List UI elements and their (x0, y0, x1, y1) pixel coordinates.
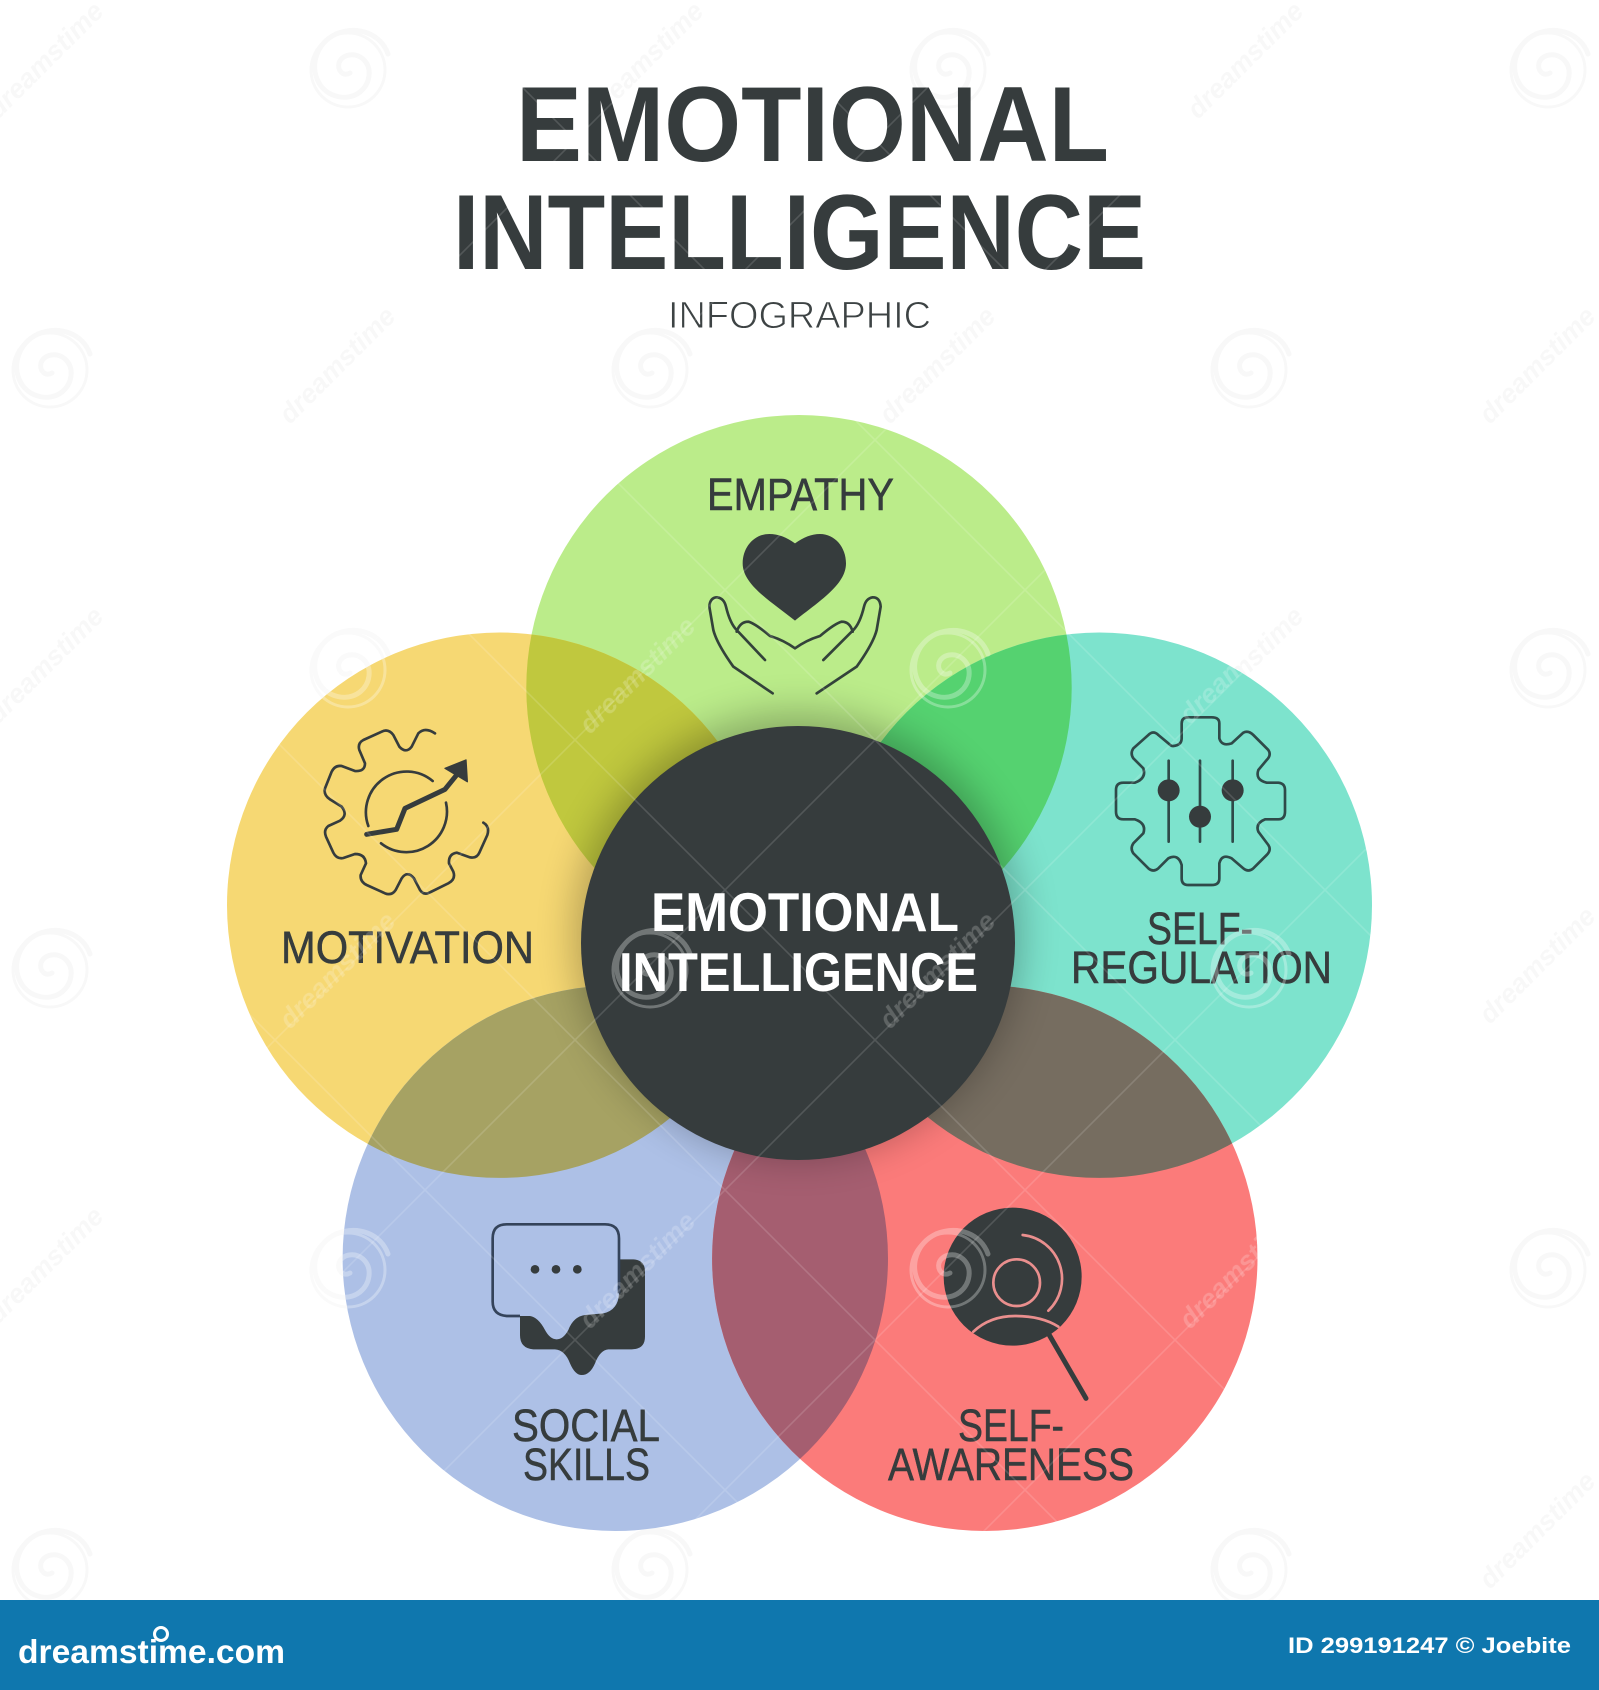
circle: self-awareness (712, 986, 1258, 1531)
center circle shadow (576, 713, 1020, 1157)
watermark: background pattern on white: dreamstime (273, 301, 401, 429)
label: self-regulation: SELF- (1147, 903, 1253, 954)
watermark: overlay on colored areas (227, 88, 1372, 1531)
center circle (581, 726, 1015, 1160)
watermark: overlay on colored areas: dreamstime (573, 1206, 701, 1334)
label: motivation: MOTIVATION (281, 922, 534, 973)
icon: heart in hands (709, 534, 881, 693)
title (453, 64, 1146, 292)
center label: EMOTIONAL (651, 881, 959, 943)
watermark: overlay on colored areas: dreamstime (1173, 1206, 1301, 1334)
watermark: background pattern on white: dreamstime (873, 301, 1001, 429)
watermark: background pattern on white: dreamstime (1473, 1466, 1599, 1594)
title: EMOTIONAL (516, 64, 1109, 184)
watermark: overlay on colored areas: dreamstime (273, 906, 401, 1034)
label: social skills: SOCIAL (512, 1400, 660, 1451)
subtitle: INFOGRAPHIC (668, 295, 931, 337)
circle: social skills (343, 986, 888, 1531)
icon: magnifying glass on person (944, 1208, 1086, 1398)
watermark: overlay on colored areas: dreamstime (1173, 601, 1301, 729)
overlap: social skills and self-awareness (712, 1149, 888, 1459)
icon: logo spiral (154, 1628, 168, 1640)
watermark: overlay on colored areas: dreamstime (873, 906, 1001, 1034)
watermark: overlay on colored areas: dreamstime (573, 611, 701, 739)
overlap: empathy and motivation (526, 634, 718, 868)
circle: self-regulation (827, 632, 1372, 1178)
label: self-awareness: SELF- (958, 1400, 1064, 1451)
title: INTELLIGENCE (453, 172, 1146, 292)
icon: gear with rising arrow (325, 730, 488, 894)
overlap: self-regulation and self-awareness (928, 986, 1232, 1178)
footer logo: dreamstime.com (18, 1633, 285, 1670)
label: self-regulation (1071, 903, 1332, 993)
footer bar (0, 1600, 1599, 1690)
label: self-awareness: AWARENESS (888, 1439, 1134, 1490)
label: self-awareness (888, 1400, 1134, 1490)
watermark: background pattern on white: dreamstime (1473, 901, 1599, 1029)
footer credit: ID 299191247 © Joebite (1288, 1633, 1571, 1658)
label: self-regulation: REGULATION (1071, 942, 1332, 993)
center label: INTELLIGENCE (619, 941, 978, 1003)
label: empathy: EMPATHY (707, 469, 894, 520)
circle: motivation (227, 632, 772, 1178)
watermark: background pattern on white: dreamstime (1473, 301, 1599, 429)
venn diagram (227, 415, 1372, 1531)
watermark: background pattern on white: dreamstime (1181, 601, 1309, 729)
overlap: empathy and self-regulation (880, 634, 1072, 870)
overlap: motivation and social skills (368, 987, 670, 1178)
icon: gear with sliders (1116, 717, 1285, 885)
circle: empathy (526, 415, 1072, 960)
label: social skills: SKILLS (523, 1439, 650, 1490)
center label (619, 881, 978, 1003)
icon: speech bubbles (493, 1224, 645, 1375)
label: social skills (512, 1400, 660, 1490)
